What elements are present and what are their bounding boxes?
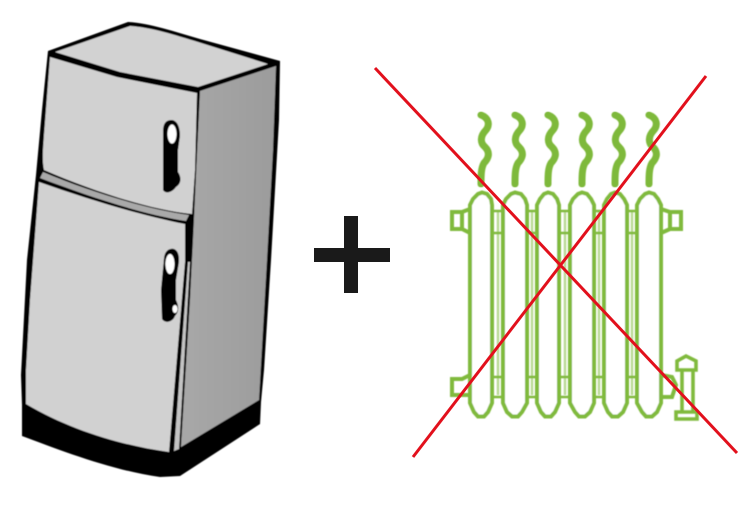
plus sign <box>314 216 390 293</box>
bottom left cap <box>452 375 470 395</box>
fridge outline silhouette <box>21 22 280 477</box>
door gap strip <box>40 172 189 221</box>
lower door <box>26 182 185 452</box>
top right cap <box>661 209 681 233</box>
fridge side face <box>181 66 276 447</box>
upper door <box>43 57 197 214</box>
bottom right cap <box>661 375 676 397</box>
radiator columns <box>470 192 492 416</box>
icon: radiator <box>452 192 697 419</box>
top left cap <box>452 209 470 233</box>
lower handle <box>161 249 179 322</box>
side trim strip <box>174 262 190 451</box>
valve <box>676 356 697 419</box>
upper handle <box>163 120 180 192</box>
fridge top face <box>55 26 268 87</box>
icon: refrigerator <box>21 22 280 477</box>
heat waves <box>481 115 656 184</box>
red cross <box>375 68 737 457</box>
radiator connectors <box>498 212 632 395</box>
